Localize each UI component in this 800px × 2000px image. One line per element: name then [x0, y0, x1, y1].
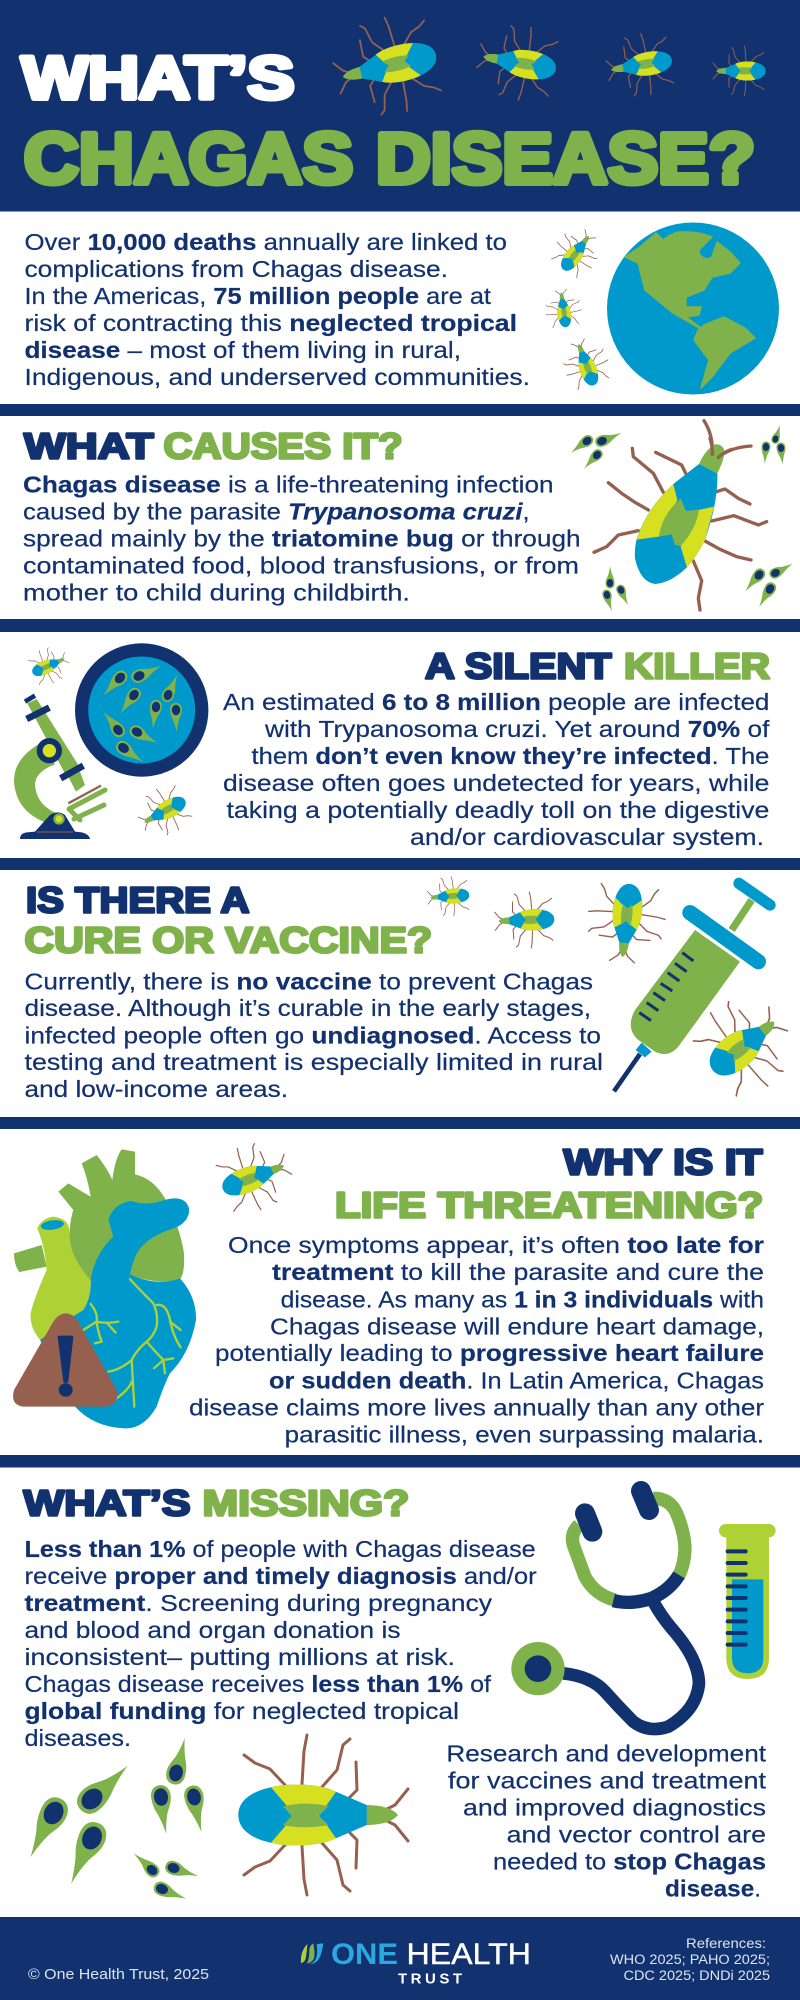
- heading: a silent killer: [425, 646, 770, 687]
- icon: row of triatomine bugs: [326, 8, 766, 125]
- text block: silent killer: taking a potentially deadly toll on the digestive: [226, 797, 769, 823]
- text block: silent killer: An estimated 6 to 8 million people are infected: [223, 689, 769, 715]
- text block: life threatening: [189, 1232, 764, 1448]
- text block: diagnosis and funding gap: and blood and organ donation is: [24, 1617, 401, 1643]
- text block: cure or vaccine: and low-income areas.: [24, 1076, 288, 1102]
- text block: causes: [23, 472, 581, 606]
- references: WHO 2025; PAHO 2025;: [610, 1952, 770, 1967]
- text block: research call: needed to stop Chagas: [493, 1849, 766, 1875]
- heading: life threatening: LIFE THREATENING?: [335, 1184, 763, 1225]
- text block: deaths and risk: risk of contracting this neglected tropical: [24, 310, 517, 336]
- icon: globe showing the Americas: [607, 222, 779, 394]
- copyright: © One Health Trust, 2025: [28, 1966, 209, 1983]
- icon: bug near heart: [211, 1134, 300, 1220]
- title: WHAT’S: [22, 44, 294, 112]
- icon: syringe: [614, 883, 770, 1091]
- logo: One Health Trust: TRUST: [398, 1970, 462, 1988]
- text block: cure or vaccine: Currently, there is no vaccine to prevent Chagas: [24, 968, 593, 994]
- text block: life threatening: or sudden death . In Latin America, Chagas: [269, 1368, 764, 1394]
- heading: what's missing: WHAT’S: [24, 1482, 190, 1523]
- panel: deaths and risk: [24, 221, 779, 394]
- text block: diagnosis and funding gap: global funding for neglected tropical: [24, 1698, 459, 1724]
- icon: test tube: [719, 1524, 776, 1679]
- text block: diagnosis and funding gap: [24, 1536, 537, 1751]
- heading: what causes it: CAUSES IT?: [164, 426, 402, 467]
- text block: causes: caused by the parasite Trypanosoma cruzi ,: [23, 499, 530, 525]
- panel: is there a cure or vaccine: [24, 875, 800, 1107]
- panel: a silent killer: [14, 642, 770, 850]
- text block: causes: contaminated food, blood transfusions, or from: [23, 553, 579, 579]
- icon: bug on syringe: [684, 982, 800, 1107]
- heading: a silent killer: KILLER: [624, 646, 770, 687]
- icon: parasites cluster: [19, 1736, 211, 1905]
- heading: life threatening: WHY IS IT: [564, 1141, 762, 1182]
- text block: silent killer: and/or cardiovascular system.: [410, 824, 764, 850]
- logo: One Health Trust: HEALTH: [406, 1938, 531, 1971]
- text block: life threatening: Once symptoms appear, it’s often too late for: [228, 1232, 764, 1258]
- text block: silent killer: disease often goes undetected for years, while: [223, 770, 769, 796]
- references: References:: [686, 1936, 766, 1951]
- text block: causes: mother to child during childbirth.: [23, 580, 410, 606]
- text block: deaths and risk: Over 10,000 deaths annually are linked to: [24, 229, 507, 255]
- text block: research call: Research and development: [446, 1741, 767, 1767]
- heading: a silent killer: A SILENT: [425, 646, 612, 687]
- text block: diagnosis and funding gap: diseases.: [24, 1725, 131, 1751]
- icon: magnified lens with parasites: [75, 643, 208, 777]
- heading: cure or vaccine: CURE OR VACCINE?: [24, 920, 432, 960]
- text block: deaths and risk: disease – most of them living in rural,: [24, 337, 461, 363]
- text block: diagnosis and funding gap: Chagas disease receives less than 1% of: [24, 1671, 492, 1697]
- text block: diagnosis and funding gap: inconsistent– putting millions at risk.: [24, 1644, 455, 1670]
- icon: large triatomine bug: [594, 421, 767, 610]
- text block: diagnosis and funding gap: receive proper and timely diagnosis and/or: [24, 1563, 537, 1589]
- text block: research call: for vaccines and treatment: [448, 1768, 767, 1794]
- text block: life threatening: potentially leading to progressive heart failure: [215, 1340, 764, 1366]
- panel: why is it life threatening: [13, 1134, 764, 1448]
- text block: research call: [446, 1741, 767, 1902]
- text block: cure or vaccine: disease. Although it’s curable in the early stages,: [24, 995, 591, 1021]
- text block: deaths and risk: In the Americas, 75 million people are at: [24, 283, 492, 309]
- text block: silent killer: them don’t even know they’re infected . The: [252, 743, 769, 769]
- text block: cure or vaccine: [24, 968, 603, 1102]
- panel: header banner: [0, 0, 800, 212]
- panel: what's missing: [19, 1482, 776, 1905]
- heading: cure or vaccine: IS THERE A: [26, 879, 249, 920]
- text block: research call: and vector control are: [507, 1822, 766, 1848]
- text block: silent killer: with Trypanosoma cruzi. Yet around 70% of: [264, 716, 770, 742]
- heading: cure or vaccine: [24, 879, 432, 960]
- text block: deaths and risk: [24, 229, 530, 390]
- title: [22, 44, 755, 199]
- text block: deaths and risk: complications from Chagas disease.: [24, 256, 448, 282]
- references: [610, 1936, 770, 1983]
- heading: what causes it: [24, 426, 402, 467]
- icon: small bugs near globe: [543, 221, 615, 393]
- text block: silent killer: [223, 689, 770, 850]
- icon: large bug: [238, 1735, 408, 1895]
- text block: life threatening: disease claims more lives annually than any other: [189, 1395, 764, 1421]
- text block: research call: disease.: [665, 1876, 761, 1902]
- icon: microscope: [14, 696, 105, 839]
- icon: small bugs by syringe: [426, 875, 668, 966]
- text block: research call: and improved diagnostics: [463, 1795, 766, 1821]
- panel: what causes it: [23, 421, 795, 613]
- heading: what causes it: WHAT: [24, 426, 154, 467]
- references: CDC 2025; DNDi 2025: [624, 1968, 770, 1983]
- icon: small bugs near microscope: [25, 642, 196, 844]
- text block: causes: spread mainly by the triatomine bug or through: [23, 526, 581, 552]
- heading: what's missing: MISSING?: [202, 1482, 409, 1523]
- logo: One Health Trust: ONE: [331, 1938, 398, 1971]
- text block: cure or vaccine: testing and treatment is especially limited in rural: [24, 1049, 603, 1075]
- text block: life threatening: parasitic illness, even surpassing malaria.: [285, 1422, 764, 1448]
- icon: heart with warning sign: [13, 1149, 196, 1428]
- icon: parasites around bug: [568, 424, 795, 613]
- text block: life threatening: treatment to kill the parasite and cure the: [272, 1259, 764, 1285]
- title: DISEASE?: [376, 120, 755, 199]
- text block: diagnosis and funding gap: treatment . Screening during pregnancy: [24, 1590, 493, 1616]
- logo: One Health Trust: [301, 1938, 531, 1988]
- text block: causes: Chagas disease is a life-threatening infection: [23, 472, 554, 498]
- title: CHAGAS: [24, 120, 353, 199]
- heading: life threatening: [335, 1141, 763, 1225]
- icon: stethoscope: [511, 1491, 699, 1729]
- heading: what's missing: [24, 1482, 409, 1523]
- text block: cure or vaccine: infected people often go undiagnosed . Access to: [24, 1022, 601, 1048]
- text block: deaths and risk: Indigenous, and underserved communities.: [24, 364, 530, 390]
- text block: life threatening: disease. As many as 1 in 3 individuals with: [281, 1286, 764, 1312]
- text block: life threatening: Chagas disease will endure heart damage,: [270, 1314, 764, 1340]
- text block: diagnosis and funding gap: Less than 1% of people with Chagas disease: [24, 1536, 536, 1562]
- panel: footer: [0, 1917, 800, 2000]
